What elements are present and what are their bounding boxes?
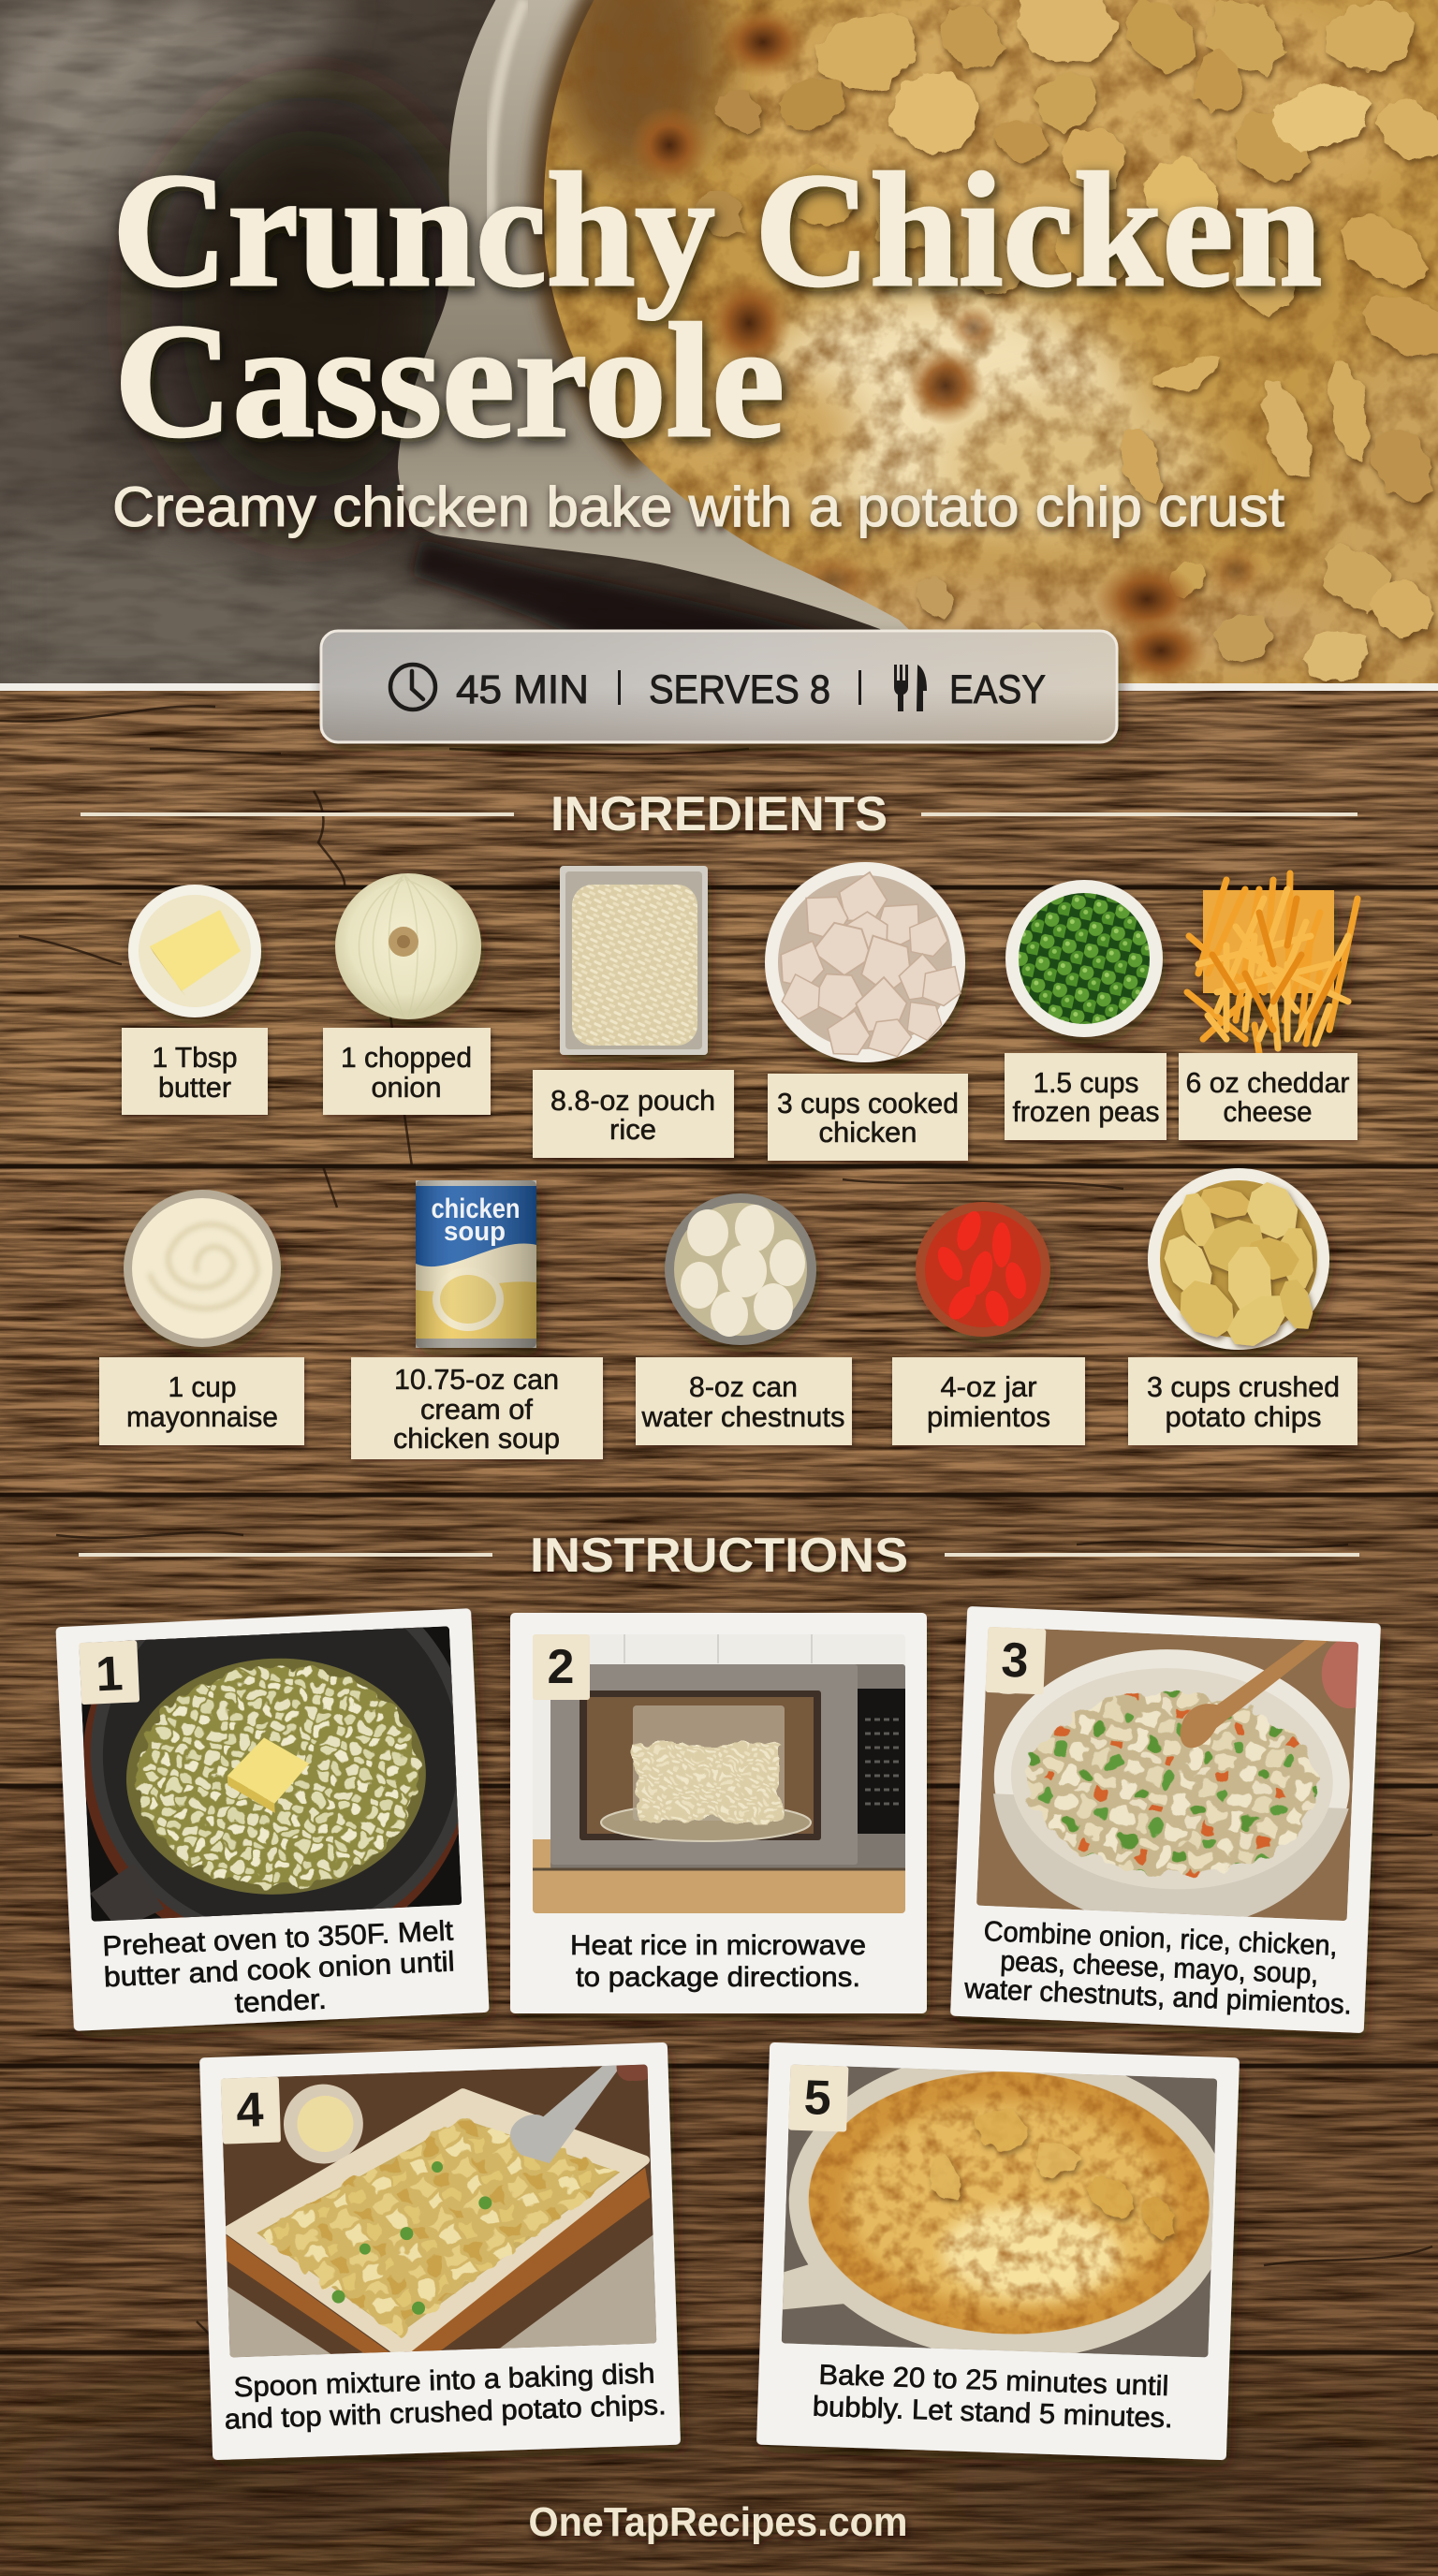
label xyxy=(99,1357,304,1445)
step text: Combine onion, rice, chicken, xyxy=(983,1916,1338,1962)
divider bar xyxy=(858,670,861,705)
panel: ingredients: cheese xyxy=(1223,1095,1313,1128)
panel: ingredients: butter xyxy=(158,1071,231,1104)
heading: instructions: INSTRUCTIONS xyxy=(530,1529,908,1583)
panel: ingredients: 1 Tbsp xyxy=(152,1041,238,1074)
icon: mayonnaise bowl xyxy=(124,1190,281,1347)
title xyxy=(112,139,1322,471)
number badge: 1 xyxy=(95,1647,125,1702)
panel: ingredients: chicken soup xyxy=(393,1422,560,1455)
heading: ingredients: INGREDIENTS xyxy=(550,787,888,842)
number badge xyxy=(986,1627,1046,1694)
step text: Preheat oven to 350F. Melt xyxy=(102,1915,455,1962)
panel: ingredients: cream of xyxy=(420,1393,533,1426)
panel: ingredients: 4-oz jar xyxy=(940,1370,1037,1403)
icon: clock xyxy=(390,665,435,710)
panel: step 4 xyxy=(199,2042,681,2460)
panel: ingredients: mayonnaise xyxy=(126,1400,278,1433)
icon: can of water chestnuts xyxy=(665,1193,816,1345)
icon: fork and knife xyxy=(894,665,927,711)
icon: chicken soup can: soup xyxy=(444,1217,506,1247)
panel: ingredients: 1 cup xyxy=(169,1370,236,1403)
servings: SERVES 8 xyxy=(649,667,830,712)
photo: rice in microwave xyxy=(533,1634,905,1914)
panel: ingredients: 8.8-oz pouch xyxy=(550,1084,715,1117)
label xyxy=(1005,1053,1167,1140)
step text xyxy=(223,2358,667,2436)
step text: to package directions. xyxy=(576,1962,860,1993)
icon: jar of pimientos xyxy=(916,1202,1050,1337)
footer website: OneTapRecipes.com xyxy=(528,2499,908,2545)
panel: ingredients: onion xyxy=(371,1071,442,1104)
panel: ingredients: frozen peas xyxy=(1013,1095,1159,1128)
step text: and top with crushed potato chips. xyxy=(224,2390,667,2436)
step text xyxy=(812,2360,1174,2434)
label xyxy=(323,1028,491,1115)
icon: bowl of chicken xyxy=(765,862,965,1064)
icon: shredded cheddar xyxy=(1187,873,1357,1053)
step text: bubbly. Let stand 5 minutes. xyxy=(812,2392,1173,2434)
title: Casserole xyxy=(114,290,785,471)
photo: baking dish xyxy=(216,2052,664,2385)
label xyxy=(122,1028,268,1115)
title: Crunchy Chicken xyxy=(112,139,1322,320)
step text: tender. xyxy=(234,1984,328,2019)
label xyxy=(533,1070,734,1158)
photo: baked casserole xyxy=(781,2043,1234,2366)
number badge: 3 xyxy=(1000,1633,1030,1689)
divider bar xyxy=(618,670,621,705)
hero food xyxy=(524,0,1438,711)
icon: bowl of potato chips xyxy=(1148,1168,1329,1357)
number badge xyxy=(533,1634,590,1700)
white divider under hero xyxy=(0,683,1438,691)
panel: ingredients: 6 oz cheddar xyxy=(1185,1066,1350,1099)
panel: step 1 xyxy=(53,1555,490,2031)
stats bar xyxy=(321,631,1117,742)
hero browned spots xyxy=(630,7,1264,684)
label xyxy=(768,1074,968,1161)
step text: water chestnuts, and pimientos. xyxy=(963,1973,1353,2020)
number badge: 2 xyxy=(548,1640,574,1694)
panel: step 5 xyxy=(756,2042,1240,2460)
step text xyxy=(570,1930,866,1993)
step text: butter and cook onion until xyxy=(103,1946,455,1993)
panel: ingredients: 3 cups cooked xyxy=(777,1087,959,1120)
difficulty: EASY xyxy=(949,667,1046,712)
number badge xyxy=(788,2065,848,2132)
hero chips xyxy=(687,0,1438,695)
label xyxy=(1128,1357,1357,1445)
panel: ingredients: pimientos xyxy=(927,1400,1050,1433)
photo: mixing bowl xyxy=(961,1619,1379,1936)
icon: chicken soup can: chicken xyxy=(431,1193,521,1224)
panel: ingredients: potato chips xyxy=(1165,1400,1322,1433)
icon: chicken soup can xyxy=(416,1180,536,1348)
step text: Heat rice in microwave xyxy=(570,1930,866,1961)
label xyxy=(1179,1053,1357,1140)
panel: ingredients: 10.75-oz can xyxy=(394,1363,559,1396)
hero photo: casserole dish xyxy=(0,0,1438,711)
step text: Spoon mixture into a baking dish xyxy=(233,2358,655,2403)
number badge: 4 xyxy=(235,2083,264,2138)
step text: peas, cheese, mayo, soup, xyxy=(1000,1946,1319,1990)
panel: ingredients: chicken xyxy=(818,1116,917,1149)
panel: ingredients: 1.5 cups xyxy=(1034,1066,1138,1099)
label xyxy=(351,1357,603,1459)
wood background xyxy=(0,683,1438,2576)
icon: bowl of peas xyxy=(1005,880,1163,1037)
icon: butter on plate xyxy=(128,885,261,1017)
dish rim xyxy=(398,0,909,629)
number badge xyxy=(221,2077,281,2144)
panel: ingredients: water chestnuts xyxy=(641,1400,844,1433)
number badge: 5 xyxy=(803,2071,832,2126)
number badge xyxy=(79,1640,139,1705)
label xyxy=(636,1357,852,1445)
subtitle: Creamy chicken bake with a potato chip crust xyxy=(112,476,1284,538)
panel: ingredients: rice xyxy=(609,1113,656,1146)
icon: onion xyxy=(335,873,481,1019)
panel: ingredients xyxy=(99,862,1357,1459)
panel: ingredients: 3 cups crushed xyxy=(1147,1370,1340,1403)
label xyxy=(892,1357,1085,1445)
step text: Bake 20 to 25 minutes until xyxy=(818,2360,1169,2402)
panel: ingredients: 1 chopped xyxy=(341,1041,472,1074)
icon: rice pouch xyxy=(560,866,708,1055)
panel: step 3 xyxy=(950,1606,1381,2033)
photo: onions in pan xyxy=(79,1627,462,1922)
step text xyxy=(102,1915,458,2025)
panel: ingredients: 8-oz can xyxy=(689,1370,798,1403)
step text xyxy=(963,1915,1355,2020)
panel: step 2 xyxy=(510,1613,927,2013)
prep time: 45 MIN xyxy=(456,667,589,712)
